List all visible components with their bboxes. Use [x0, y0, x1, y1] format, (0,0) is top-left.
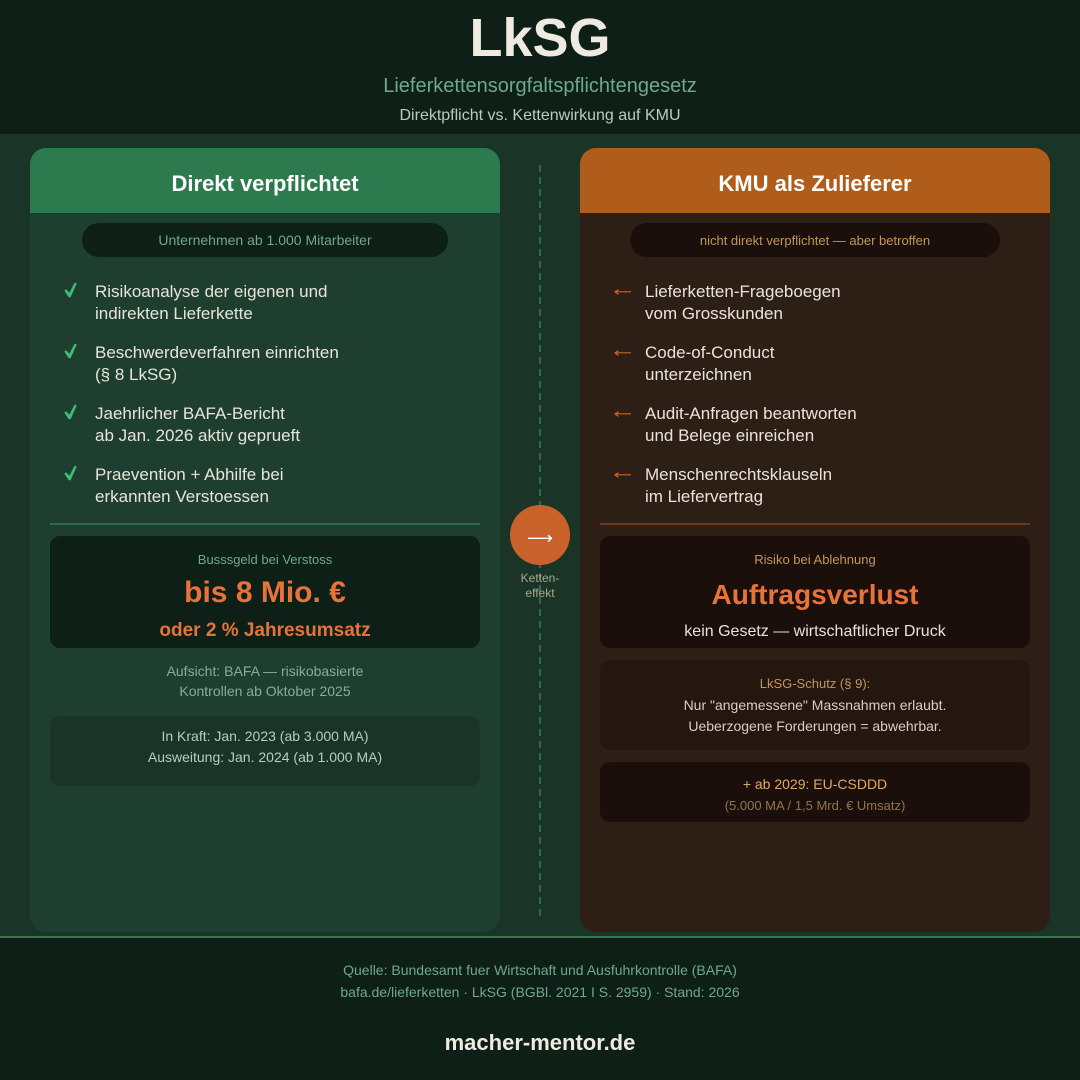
footer — [0, 936, 1080, 1080]
panel heading: direkt verpflichtet: Direkt verpflichtet — [171, 171, 359, 196]
scope pill — [82, 223, 448, 257]
status pill: nicht direkt verpflichtet — aber betroffen — [700, 233, 930, 248]
fine box — [50, 536, 480, 648]
source details: bafa.de/lieferketten · LkSG (BGBl. 2021 I S. 2959) · Stand: 2026 — [340, 984, 740, 1000]
pressure 3 — [615, 404, 857, 445]
pressure 2: unterzeichnen — [645, 365, 752, 384]
title: LkSG — [469, 8, 611, 68]
supervision note: Aufsicht: BAFA — risikobasierte — [167, 663, 364, 679]
fine box: oder 2 % Jahresumsatz — [159, 620, 371, 641]
protection box: Nur "angemessene" Massnahmen erlaubt. — [684, 697, 946, 713]
pressure 1 — [615, 282, 841, 323]
protection box: LkSG-Schutz (§ 9): — [760, 676, 870, 691]
duty 4: Praevention + Abhilfe bei — [95, 465, 284, 484]
pressure 4: im Liefervertrag — [645, 487, 763, 506]
timeline box — [50, 716, 480, 786]
panel: KMU als Zulieferer — [580, 148, 1050, 932]
duty 4 — [64, 465, 284, 506]
supervision note — [167, 663, 364, 699]
fine box: Busssgeld bei Verstoss — [198, 552, 333, 567]
tagline: Direktpflicht vs. Kettenwirkung auf KMU — [400, 107, 680, 124]
pressure 1: Lieferketten-Frageboegen — [645, 282, 841, 301]
website: macher-mentor.de — [445, 1030, 635, 1055]
dashed connector — [539, 165, 541, 916]
fine box: bis 8 Mio. € — [184, 576, 346, 609]
protection box — [600, 660, 1030, 750]
risk box: Auftragsverlust — [712, 579, 918, 610]
duty 2: Beschwerdeverfahren einrichten — [95, 343, 339, 362]
source: Quelle: Bundesamt fuer Wirtschaft und Ausfuhrkontrolle (BAFA) — [343, 962, 737, 978]
duty 1: indirekten Lieferkette — [95, 304, 253, 323]
duty 3: ab Jan. 2026 aktiv geprueft — [95, 426, 300, 445]
panel: direkt verpflichtet — [30, 148, 500, 932]
chain effect arrow: effekt — [525, 586, 555, 600]
status pill — [630, 223, 1000, 257]
protection box: Ueberzogene Forderungen = abwehrbar. — [688, 718, 942, 734]
CSDDD box: + ab 2029: EU-CSDDD — [743, 776, 887, 792]
risk box — [600, 536, 1030, 648]
duty 4: erkannten Verstoessen — [95, 487, 269, 506]
duty 2: (§ 8 LkSG) — [95, 365, 177, 384]
timeline box: In Kraft: Jan. 2023 (ab 3.000 MA) — [161, 728, 369, 744]
supervision note: Kontrollen ab Oktober 2025 — [179, 683, 351, 699]
pressure list — [615, 282, 857, 506]
CSDDD box: (5.000 MA / 1,5 Mrd. € Umsatz) — [725, 798, 905, 813]
duty 2 — [64, 343, 339, 384]
panel heading: KMU: KMU als Zulieferer — [718, 171, 912, 196]
CSDDD box — [600, 762, 1030, 822]
chain effect arrow — [510, 505, 570, 600]
duty 3: Jaehrlicher BAFA-Bericht — [95, 404, 285, 423]
pressure 3: Audit-Anfragen beantworten — [645, 404, 857, 423]
subtitle: Lieferkettensorgfaltspflichtengesetz — [383, 75, 697, 97]
risk box: Risiko bei Ablehnung — [754, 552, 876, 567]
pressure 4: Menschenrechtsklauseln — [645, 465, 832, 484]
chain effect arrow: Ketten- — [521, 571, 559, 585]
pressure 2 — [615, 343, 775, 384]
header — [0, 0, 1080, 134]
duty list — [64, 282, 339, 506]
duty 1 — [64, 282, 328, 323]
scope pill: Unternehmen ab 1.000 Mitarbeiter — [158, 232, 372, 248]
pressure 2: Code-of-Conduct — [645, 343, 775, 362]
duty 1: Risikoanalyse der eigenen und — [95, 282, 328, 301]
panel heading: direkt verpflichtet — [30, 148, 500, 213]
panel heading: KMU — [580, 148, 1050, 213]
duty 3 — [64, 404, 300, 445]
pressure 1: vom Grosskunden — [645, 304, 783, 323]
pressure 4 — [615, 465, 832, 506]
pressure 3: und Belege einreichen — [645, 426, 814, 445]
risk box: kein Gesetz — wirtschaftlicher Druck — [684, 623, 947, 640]
timeline box: Ausweitung: Jan. 2024 (ab 1.000 MA) — [148, 749, 382, 765]
